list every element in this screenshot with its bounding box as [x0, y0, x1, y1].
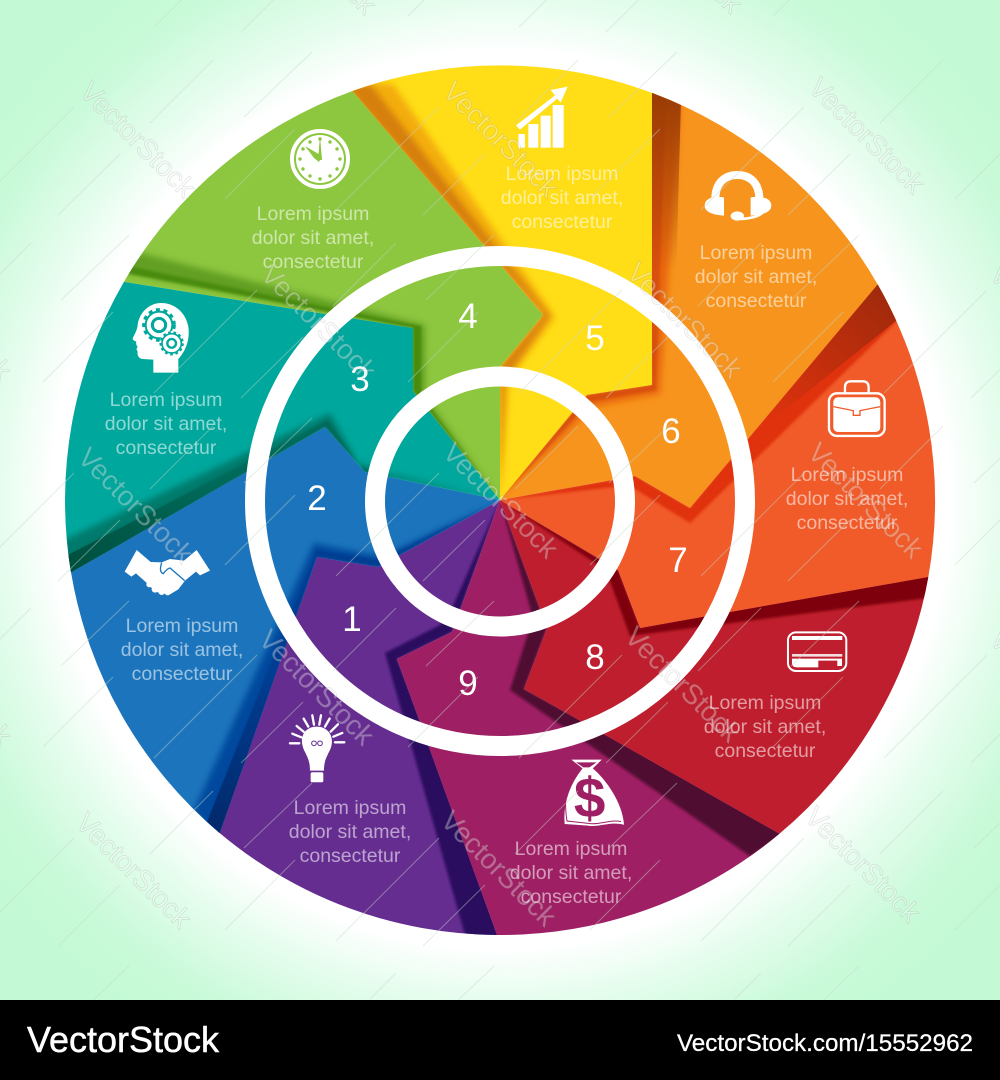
text block 3: consectetur [116, 437, 217, 459]
text block 2 [121, 615, 243, 685]
watermark: VectorStock [437, 76, 565, 204]
icon: money bag: $ [574, 767, 605, 830]
icon: credit card [788, 632, 846, 671]
text block 6: Lorem ipsum [700, 242, 812, 264]
text block 4 [252, 203, 374, 273]
segment 8: red [500, 500, 945, 834]
text block 3: dolor sit amet, [105, 413, 227, 435]
watermark: VectorStock [435, 805, 563, 933]
segmented circular diagram [60, 65, 945, 940]
watermark: VectorStock [803, 72, 931, 200]
text block 4: consectetur [263, 251, 364, 273]
text block 5 [501, 163, 623, 233]
text block 8 [704, 692, 826, 762]
text block 9: Lorem ipsum [515, 838, 627, 860]
text block 4: dolor sit amet, [252, 227, 374, 249]
text block 7: consectetur [797, 512, 898, 534]
footer logo text: VectorStock [27, 1019, 220, 1060]
number 6: 6 [661, 412, 681, 451]
outer white ring [255, 256, 745, 746]
watermark: VectorStock [437, 437, 565, 565]
segment 6: orange [500, 80, 878, 508]
text block 4: Lorem ipsum [257, 203, 369, 225]
watermark: VectorStock [802, 437, 930, 565]
text block 8: Lorem ipsum [709, 692, 821, 714]
number 2: 2 [307, 479, 327, 518]
icon: briefcase [829, 381, 885, 436]
segment 3: teal [60, 282, 500, 585]
watermark: VectorStock [70, 807, 198, 935]
segment 2: blue [71, 427, 500, 840]
watermark: VectorStock [253, 624, 381, 752]
text block 9: consectetur [521, 886, 622, 908]
text block 2: dolor sit amet, [121, 639, 243, 661]
segment 1: purple [220, 500, 510, 940]
text block 6: consectetur [706, 290, 807, 312]
text block 1 [289, 797, 411, 867]
watermark: VectorStock [619, 621, 747, 749]
text block 1: dolor sit amet, [289, 821, 411, 843]
watermark: VectorStock [255, 259, 383, 387]
icon: growth chart [516, 87, 568, 148]
text block 2: consectetur [132, 663, 233, 685]
segment 4: green [110, 91, 543, 500]
text block 2: Lorem ipsum [126, 615, 238, 637]
segment 9: magenta [397, 500, 790, 935]
number 3: 3 [350, 360, 370, 399]
footer url: VectorStock.com/15552962 [677, 1030, 973, 1057]
footer band [0, 1000, 1000, 1080]
inner white ring [375, 376, 625, 626]
watermark: VectorStock [621, 257, 749, 385]
text block 8: consectetur [715, 740, 816, 762]
text block 9 [510, 838, 632, 908]
text block 5: dolor sit amet, [501, 187, 623, 209]
icon: handshake [125, 550, 210, 595]
number 7: 7 [668, 541, 688, 580]
text block 1: Lorem ipsum [294, 797, 406, 819]
text block 6: dolor sit amet, [695, 266, 817, 288]
text block 9: dolor sit amet, [510, 862, 632, 884]
number 9: 9 [458, 664, 478, 703]
icon: light bulb [290, 715, 344, 782]
text block 5: consectetur [512, 211, 613, 233]
text block 8: dolor sit amet, [704, 716, 826, 738]
text block 5: Lorem ipsum [506, 163, 618, 185]
text block 7: dolor sit amet, [786, 488, 908, 510]
number 4: 4 [458, 297, 478, 336]
icon: head with gears [133, 303, 189, 373]
icon: clock [292, 131, 348, 187]
number 1: 1 [342, 600, 362, 639]
segment 7: orange red [500, 270, 935, 628]
watermark: VectorStock [72, 442, 200, 570]
text block 7: Lorem ipsum [791, 464, 903, 486]
text block 3: Lorem ipsum [110, 389, 222, 411]
text block 3 [105, 389, 227, 459]
watermark: VectorStock [799, 801, 927, 929]
watermark: VectorStock [74, 76, 202, 204]
segment 5: yellow [340, 65, 652, 500]
text block 1: consectetur [300, 845, 401, 867]
number 8: 8 [585, 638, 605, 677]
number 5: 5 [585, 319, 605, 358]
icon: headset [705, 175, 771, 221]
text block 6 [695, 242, 817, 312]
icon: money bag [565, 760, 624, 830]
text block 7 [786, 464, 908, 534]
